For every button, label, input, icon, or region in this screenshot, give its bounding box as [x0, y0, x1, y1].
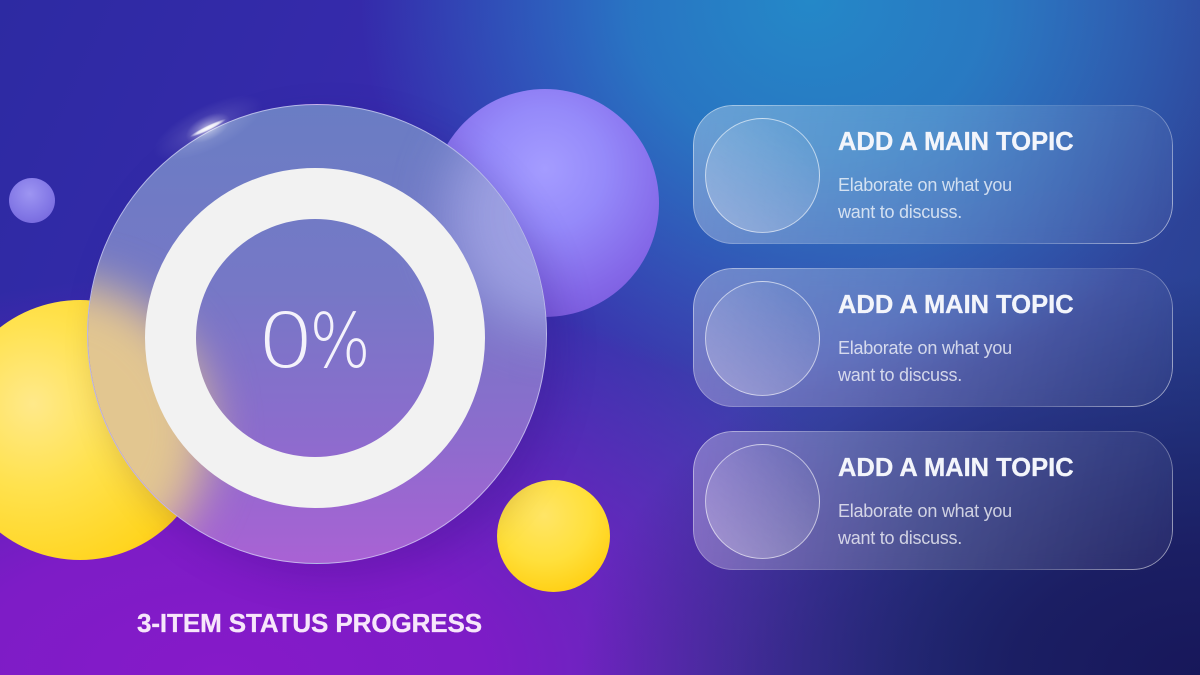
text block: topic 3: want to discuss.: [838, 528, 962, 548]
text block: topic 1: Elaborate on what you: [838, 175, 1012, 195]
heading: topic 3: ADD A MAIN TOPIC: [838, 454, 1074, 482]
panel: topic 1: [693, 105, 1173, 244]
icon: large purple sphere: [431, 89, 659, 317]
glass disc: [87, 104, 547, 564]
progress ring: [145, 168, 485, 508]
percentage value: [257, 297, 371, 385]
text block: topic 1: [838, 175, 1012, 222]
icon: empty circle 2: [705, 281, 820, 396]
icon: small purple sphere: [9, 178, 55, 223]
panel: topic 2: [693, 268, 1173, 407]
percentage value: 0: [257, 297, 315, 385]
icon: empty circle 3: [705, 444, 820, 559]
icon: light glare on disc edge: [144, 82, 272, 174]
icon: empty circle 1: [705, 118, 820, 233]
text block: topic 2: want to discuss.: [838, 364, 962, 384]
text block: topic 2: Elaborate on what you: [838, 338, 1012, 358]
heading: topic 2: ADD A MAIN TOPIC: [838, 291, 1074, 319]
text block: topic 1: want to discuss.: [838, 202, 962, 222]
text block: topic 3: [838, 501, 1012, 548]
text block: topic 2: [838, 338, 1012, 384]
heading: topic 1: ADD A MAIN TOPIC: [838, 128, 1074, 156]
icon: small yellow sphere: [497, 480, 610, 592]
text block: topic 3: Elaborate on what you: [838, 501, 1012, 521]
panel: topic 3: [693, 431, 1173, 570]
percentage value: %: [309, 298, 371, 385]
title: 3-ITEM STATUS PROGRESS: [137, 608, 482, 638]
icon: large yellow sphere: [0, 300, 210, 560]
